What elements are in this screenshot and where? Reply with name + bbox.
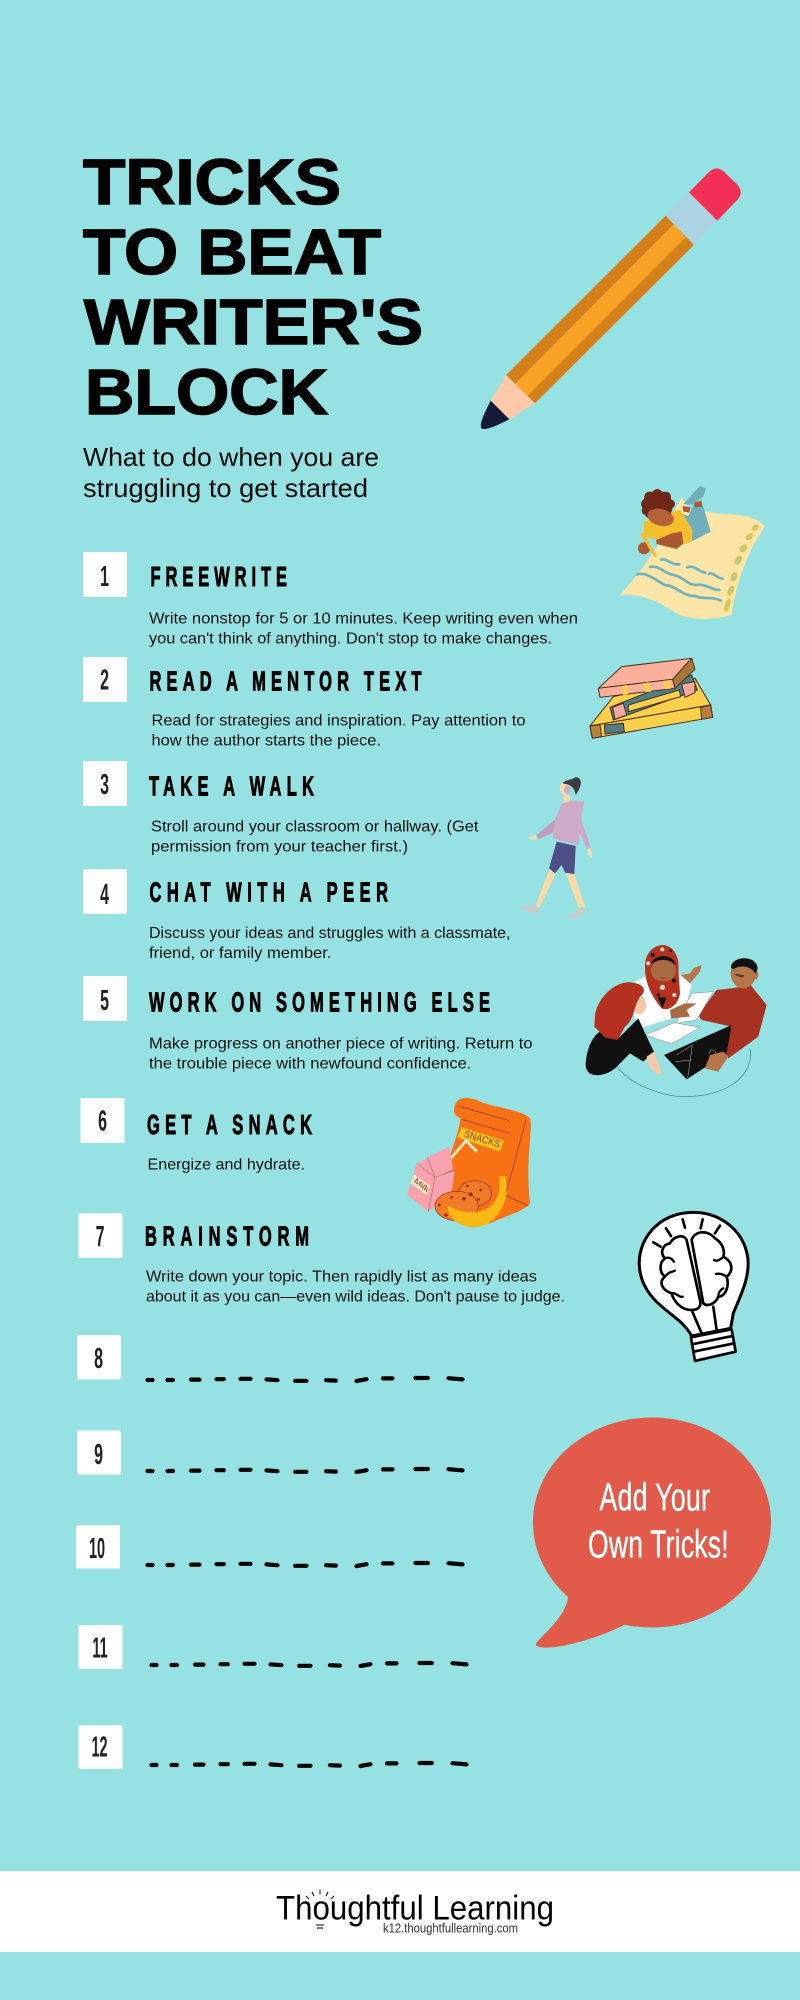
number badge 9	[77, 1430, 121, 1474]
icon: pencil	[481, 168, 741, 429]
description: chat with a peer: Discuss your ideas and struggles with a classmate,	[149, 925, 510, 942]
callout: add your own tricks speech bubble: Add Your	[600, 1476, 710, 1520]
subtitle: What to do when you are	[83, 442, 379, 472]
heading: read a mentor text: READ A MENTOR TEXT	[150, 665, 422, 697]
heading: brainstorm: BRAINSTORM	[145, 1220, 309, 1252]
number badge 3	[83, 761, 127, 806]
callout: add your own tricks speech bubble	[533, 1418, 771, 1647]
dashed writing line 9	[148, 1469, 462, 1472]
description: chat with a peer: friend, or family member.	[149, 945, 332, 962]
item 5: work on something else	[83, 976, 533, 1072]
item 3: take a walk	[83, 761, 592, 919]
number badge 12: 12	[91, 1730, 108, 1763]
description: freewrite	[149, 610, 578, 647]
icon: group of three peers	[586, 945, 767, 1097]
description: brainstorm	[146, 1268, 565, 1305]
item 7: brainstorm	[78, 1212, 748, 1361]
number badge 5	[83, 976, 127, 1021]
description: work on something else	[149, 1035, 533, 1072]
number badge 7	[78, 1213, 122, 1258]
number badge 11	[78, 1625, 122, 1669]
number badge 10: 10	[89, 1531, 105, 1564]
logo: thoughtful learning: Thoughtful Learning	[276, 1890, 554, 1928]
number badge 1: 1	[100, 560, 109, 592]
heading: get a snack: GET A SNACK	[147, 1109, 312, 1140]
dashed writing line 8	[148, 1378, 462, 1381]
description: read a mentor text: Read for strategies and inspiration. Pay attention to	[152, 712, 526, 729]
description: work on something else: Make progress on another piece of writing. Return to	[149, 1035, 533, 1052]
item 9: blank line	[77, 1430, 462, 1474]
description: brainstorm: Write down your topic. Then rapidly list as many ideas	[146, 1268, 537, 1285]
number badge 10	[76, 1525, 120, 1568]
heading: work on something else: WORK ON SOMETHING ELSE	[149, 986, 490, 1018]
subtitle: struggling to get started	[83, 473, 368, 503]
icon: light bulb with brain	[639, 1212, 748, 1361]
description: take a walk: permission from your teacher first.)	[151, 838, 408, 855]
number badge 3: 3	[100, 768, 109, 800]
item 2: read a mentor text	[83, 657, 713, 749]
description: read a mentor text	[152, 712, 526, 749]
number badge 2	[83, 657, 127, 702]
icon: stack of books	[590, 658, 713, 738]
number badge 4	[83, 869, 127, 914]
title: TRICKS	[83, 146, 341, 218]
description: freewrite: you can't think of anything. Don't stop to make changes.	[149, 630, 552, 647]
number badge 11: 11	[92, 1631, 108, 1664]
title: BLOCK	[85, 356, 328, 428]
title: TO BEAT	[83, 216, 381, 288]
icon: child writing on paper	[620, 486, 765, 619]
dashed writing line 11	[152, 1663, 466, 1666]
item 4: chat with a peer	[83, 869, 767, 1097]
title: WRITER'S	[84, 286, 423, 358]
dashed writing line 10	[148, 1563, 462, 1566]
number badge 6	[80, 1098, 124, 1143]
number badge 1	[83, 552, 127, 597]
description: work on something else: the trouble piece with newfound confidence.	[149, 1055, 472, 1072]
heading: freewrite: FREEWRITE	[150, 561, 287, 592]
number badge 2: 2	[100, 663, 109, 695]
number badge 6: 6	[98, 1105, 107, 1137]
heading: take a walk: TAKE A WALK	[149, 770, 314, 802]
number badge 8: 8	[94, 1342, 103, 1374]
item 6: get a snack	[80, 1098, 531, 1227]
number badge 12	[78, 1725, 122, 1769]
icon: snack bag, milk, cookies and banana: SNACKS	[462, 1129, 502, 1151]
description: freewrite: Write nonstop for 5 or 10 minutes. Keep writing even when	[149, 610, 578, 627]
icon: person walking	[519, 777, 592, 919]
item 12: blank line	[78, 1725, 466, 1769]
footer band	[0, 1871, 800, 1952]
heading: chat with a peer: CHAT WITH A PEER	[150, 876, 388, 908]
item 8: blank line	[77, 1335, 462, 1381]
description: read a mentor text: how the author starts the piece.	[152, 732, 381, 749]
icon: snack bag, milk, cookies and banana: Milk	[412, 1176, 432, 1194]
description: take a walk	[151, 818, 479, 855]
description: brainstorm: about it as you can—even wild ideas. Don't pause to judge.	[146, 1288, 565, 1305]
number badge 4: 4	[100, 878, 109, 910]
icon: snack bag, milk, cookies and banana	[407, 1098, 531, 1227]
item 10: blank line	[76, 1525, 462, 1568]
description: chat with a peer	[149, 925, 510, 962]
description: get a snack: Energize and hydrate.	[148, 1156, 305, 1173]
number badge 9: 9	[94, 1438, 103, 1470]
callout: add your own tricks speech bubble: Own Tricks!	[588, 1524, 729, 1567]
number badge 7: 7	[96, 1220, 104, 1252]
item 11: blank line	[78, 1625, 466, 1669]
number badge 5: 5	[100, 984, 109, 1016]
item 1: freewrite	[83, 486, 765, 647]
number badge 8	[77, 1335, 121, 1380]
title	[83, 146, 423, 428]
subtitle	[83, 442, 379, 503]
logo: thoughtful learning: k12.thoughtfullearning.com	[383, 1922, 518, 1936]
description: take a walk: Stroll around your classroom or hallway. (Get	[151, 818, 479, 835]
dashed writing line 12	[152, 1763, 466, 1766]
